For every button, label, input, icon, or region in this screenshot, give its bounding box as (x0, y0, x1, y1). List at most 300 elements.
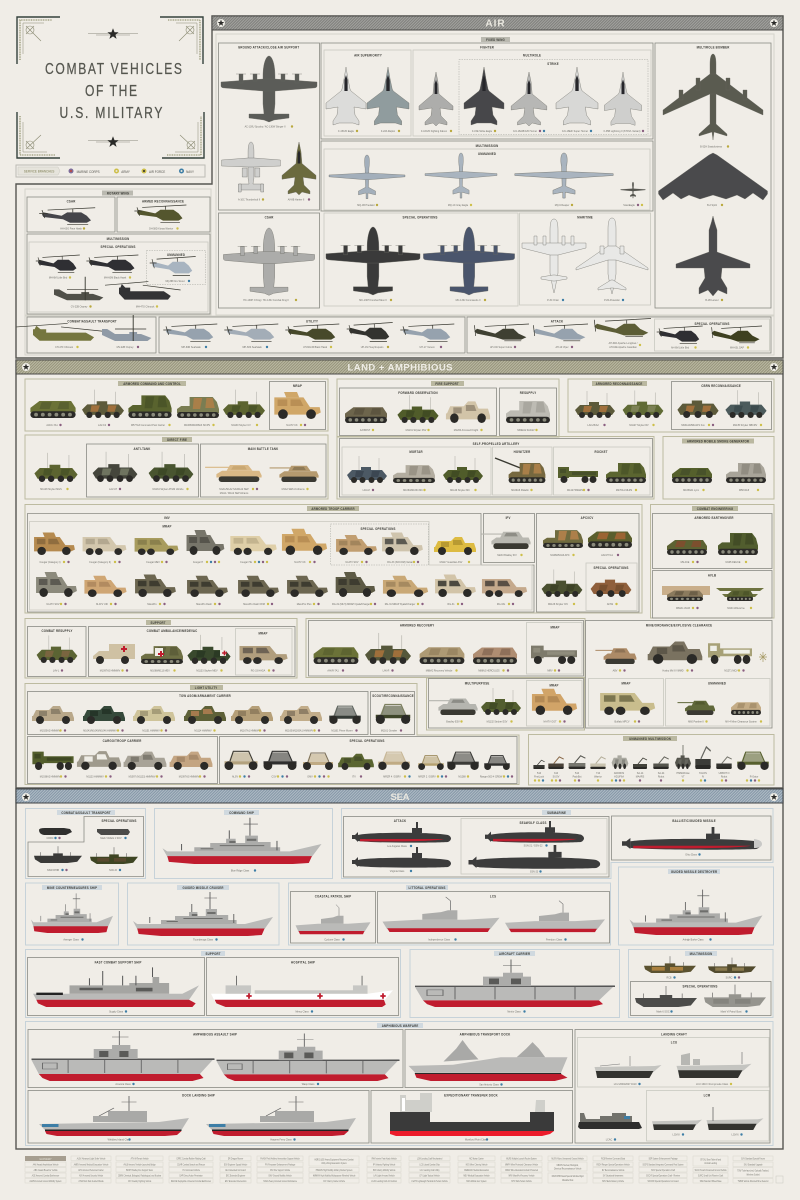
M104: M104 Wolverine (727, 606, 745, 610)
icon: winged star top (88, 28, 138, 39)
panel: armored mobile smoke generator (663, 436, 774, 499)
M997: M1097A2 HMMWV (100, 668, 120, 673)
tag: SUPPORT (151, 621, 166, 625)
LAV-C2 (82, 390, 124, 427)
heading: COMBAT RESUPPLY (42, 629, 73, 633)
M1097: M1097 (M1123) HMMWV (129, 774, 156, 779)
panel: special operations (29, 242, 208, 312)
panel: guided missile cruiser (128, 883, 279, 945)
ALSV (224, 751, 258, 779)
P-8: P-8A Poseidon (604, 298, 620, 302)
Cougar MEV: Cougar MEV (146, 560, 160, 564)
glossary column 13: SV Situational Awareness (603, 1174, 623, 1177)
M1123 (77, 751, 121, 779)
panel: mortar (342, 447, 491, 495)
glossary column 11: MRAP Mine-Resistant Ambush Protected (505, 1169, 539, 1172)
glossary column 2: ATGM Anti-Tank Guided Missile (79, 1180, 104, 1183)
Cougar II (83, 537, 126, 564)
F-22: F-22A Raptor (381, 129, 395, 133)
tag: AMPHIBIOUS WARFARE (382, 1024, 419, 1028)
AH-64: AH-64D Apache Longbow / (609, 341, 638, 345)
Prime Mover: M1161 Prime Mover (331, 728, 353, 733)
MV-22: MV-22B Osprey (117, 345, 134, 349)
panel: unmanned multimission (528, 734, 774, 785)
panel: multirole bomber (655, 43, 771, 308)
MRZR 2: MRZR 2 / DSRV (418, 774, 436, 779)
panel: unmanned (666, 678, 770, 726)
Growler: M1161 Growler (381, 728, 397, 733)
glossary column 15: SURC Small Unit Riverine Craft (698, 1174, 723, 1177)
AC-130 (221, 56, 317, 129)
glossary column 9: LCS Littoral Combat Ship (420, 1163, 440, 1166)
M997 (93, 644, 135, 673)
M1A1: M1A1/M1A2 SA/M1A2 SEP (219, 487, 249, 491)
glossary column 15 (693, 1156, 728, 1183)
ALSV: ALSV (232, 774, 238, 779)
heading: MRAP (621, 681, 631, 686)
Ticonderoga: Ticonderoga Class (193, 937, 214, 942)
glossary column 16: Wireless Guided (747, 1174, 760, 1176)
panel: special operations (28, 816, 144, 876)
MaxxPro Dash: MaxxPro Dash (196, 602, 212, 606)
MQ-1 (329, 155, 405, 207)
panel: amphibious warfare (26, 1022, 773, 1146)
AV-8B (282, 142, 316, 202)
Mercy (211, 976, 393, 1014)
robot 7: Robot (658, 774, 664, 779)
MH-47 (105, 282, 181, 309)
Mercy: Mercy Class (296, 1009, 309, 1014)
header band: sea (16, 789, 783, 803)
CSV: CSV (272, 774, 277, 779)
title line 1: COMBAT VEHICLES (45, 60, 182, 77)
M1271: M1271 MCV (724, 668, 738, 673)
robot 7 (653, 757, 669, 782)
Blue Ridge (162, 818, 322, 873)
robot 5 (611, 755, 628, 782)
tag: UNMANNED MULTIMISSION (629, 737, 671, 741)
glossary column 16: SVU Standard Upgrade (744, 1163, 763, 1166)
glossary column 4 (169, 1156, 213, 1183)
glossary column 7: Utility Lifting Evacuation System (321, 1162, 347, 1165)
glossary column 13 (593, 1156, 633, 1183)
robot 1: FirstLook (534, 774, 545, 779)
M9 ACE: M9 ACE (681, 560, 690, 564)
SSN-21: SSN-21 / SSN-22 (524, 843, 543, 848)
panel: multimission (628, 950, 773, 1018)
AAV C7: AAVC-7A1 (46, 423, 58, 427)
glossary column 11: MRV MaxxPro Recovery Vehicle (509, 1175, 535, 1177)
M93 Fox: M93A1/M93A1P1 Fox (681, 423, 705, 427)
panel: MRAP (270, 382, 326, 430)
LAV-R (365, 633, 411, 673)
panel: MRAP (30, 522, 532, 610)
M113: M1068/M113 APC (550, 553, 570, 557)
UH-1N (347, 322, 393, 349)
glossary column 16: TOW Tube-launched, Optically Tracked, (737, 1169, 769, 1173)
section: LAND + AMPHIBIOUS (16, 360, 783, 788)
panel: submarine (342, 808, 773, 878)
glossary column 10: MEV Medical Evacuation Vehicle (464, 1174, 490, 1177)
M1167: M1167A1 HMMWV (240, 728, 260, 733)
panel: special operations (220, 736, 517, 784)
LAV-C2: LAV-C2 (98, 423, 107, 427)
heading: ARMED RECONNAISSANCE (142, 199, 185, 204)
F-15E (464, 67, 504, 133)
M-ATV SOV row 2: M-ATV SOV (47, 602, 60, 606)
panel: combat ambulance (88, 626, 295, 676)
section: AIR (16, 16, 783, 358)
heading: STRIKE (547, 62, 559, 66)
header band: sea: SEA (390, 792, 410, 803)
M1064 (393, 465, 435, 492)
M1131: M1131 Stryker FSV (406, 428, 427, 432)
tag (494, 951, 535, 956)
glossary (25, 1156, 783, 1183)
panel: seawolf class (461, 818, 607, 874)
M1117 (434, 537, 476, 564)
MH-60R: MH-60R Seahawk (181, 345, 201, 349)
publisher mark (776, 1176, 783, 1183)
MQ-9: MQ-9 Reaper (555, 203, 569, 207)
panel: combat assault transport (26, 808, 146, 878)
heading: SPECIAL OPERATIONS (402, 215, 438, 220)
tag: ARMORED COMMAND AND CONTROL (123, 382, 181, 386)
panel: multipurpose (426, 678, 584, 730)
M1128: M1128 Stryker MGS (40, 487, 62, 491)
Blue Ridge: Blue Ridge Class (231, 868, 250, 873)
MRZR (378, 752, 411, 779)
panel: special operations (654, 319, 770, 351)
glossary column 6: FAASV Field Artillery Ammunition Support Vehicle (260, 1157, 301, 1160)
heading: ROCKET (595, 450, 608, 454)
glossary column 14: SOC Special Operations Craft (651, 1169, 675, 1172)
robot 8: HMMW/Jaw (677, 771, 689, 775)
M-ATV CK: M-ATV CK (294, 560, 306, 564)
glossary column 8: LCAC Landing Craft Air Cushion (371, 1180, 398, 1183)
heading: SPECIAL OPERATIONS (694, 322, 730, 326)
M1114 (184, 706, 226, 733)
LAV-25: LAV-25/A2 (587, 423, 599, 427)
glossary column 5: EXC Extended Engineer (226, 1174, 245, 1177)
robot 9 (695, 747, 711, 782)
tag: rotary wing: ROTARY WING (107, 191, 129, 196)
Cougar I: Cougar (Category I) (39, 560, 61, 564)
robot 3: PackBot (573, 774, 582, 779)
AH-64 (594, 318, 651, 349)
M113 MEV: M1068/M113 MEV (150, 668, 170, 673)
M1200 (446, 401, 490, 432)
glossary heading: GLOSSARY (39, 1156, 52, 1161)
M1126: M1126 Stryker ICV (548, 602, 568, 606)
panel: unmanned (324, 149, 650, 210)
panel: amphibious transport dock (405, 1030, 572, 1088)
tag: LIGHT UTILITY (195, 686, 218, 690)
RG-31 Mk3 (332, 572, 376, 606)
panel: support (26, 950, 400, 1018)
title line 3: U.S. MILITARY (60, 104, 162, 121)
P-3: P-3C Orion (547, 298, 559, 302)
MaxxPro Dash DXM (238, 576, 279, 606)
heading: MRAP (258, 631, 268, 636)
glossary column 6: FSV Fire Support Vehicle (270, 1169, 291, 1172)
M113 MEV (141, 646, 183, 673)
header band: AIR (212, 16, 783, 30)
panel: resupply (500, 388, 556, 436)
heading: ATTACK (551, 319, 563, 324)
M1130 (223, 390, 265, 427)
tag: SUPPORT (206, 952, 221, 956)
glossary column 15: SUGV Small Unmanned Ground Vehicle (695, 1170, 727, 1172)
MaxxPro: MaxxPro (147, 602, 157, 606)
glossary column 9: LSATV Lightweight Tactical All-Terrain Vehicle (411, 1180, 448, 1183)
heading: APC/ICV (581, 516, 594, 520)
panel: amphibious assault ship (28, 1030, 403, 1088)
Avenger: Avenger Class (63, 937, 79, 942)
CRRC: CRRC (47, 836, 53, 840)
panel: mine ordnance explosive clearance (586, 620, 772, 728)
glossary column 14 (639, 1156, 687, 1183)
M984 (473, 648, 517, 673)
robot 3 (569, 756, 585, 782)
glossary column 1: AAV Assault Amphibious Vehicle (33, 1163, 59, 1166)
tag: fixed wing: FIXED WING (486, 38, 505, 42)
LAV-AT: LAV-AT (109, 487, 117, 491)
glossary column 2 (71, 1156, 111, 1183)
SOC-R: SOC-R (109, 868, 117, 872)
Nimitz: Nimitz Class (507, 1009, 521, 1014)
MaxxPro Dash (187, 576, 228, 606)
glossary column 6 (257, 1156, 303, 1183)
RCB: RCB (666, 975, 672, 980)
heading: UNMANNED (478, 152, 496, 156)
B-2: B-2 Spirit (707, 203, 717, 207)
M1025 (32, 706, 74, 733)
glossary column 10 (458, 1156, 495, 1183)
LCU 2000 (594, 1056, 662, 1086)
glossary column 3 (116, 1156, 163, 1183)
glossary column 12: NBCRV Nuclear, Biological, (557, 1165, 579, 1167)
heading: AIR SUPERIORITY (354, 53, 382, 58)
heading: AVLB (708, 573, 716, 578)
RCB (644, 956, 696, 980)
glossary heading (25, 1156, 66, 1161)
legend: service branches (16, 165, 205, 177)
M1135: M1135 Stryker NBCRV (733, 423, 757, 427)
Mark 6 (635, 986, 697, 1014)
Supply: Supply Class (109, 1009, 124, 1014)
glossary column 3: CBRN Chemical, Biological, Radiological, and Nuclear (118, 1175, 161, 1177)
HH-60G: HH-60G Pave Hawk (60, 226, 82, 231)
Panther: M60 Panther II (688, 719, 704, 724)
heading: MULTIMISSION (107, 236, 130, 241)
panel: fixed wing (216, 34, 774, 315)
M1117: M1117 Guardian ASV (440, 560, 463, 564)
glossary column 13: RCB Riverine Command Boat (601, 1157, 625, 1160)
Independence (382, 897, 500, 942)
panel: rotary wing (25, 189, 211, 315)
M58: M58 Wolf (739, 488, 749, 492)
heading: CBRN RECONNAISSANCE (701, 384, 741, 388)
robot 1: 510 (537, 771, 541, 775)
AAV-P7: AAV-P7/A1 (601, 553, 613, 557)
Ranger: Ranger 500 4 CREW (480, 774, 503, 779)
M88A2 (420, 647, 464, 673)
AC-130: AC-130U Spooky / AC-130W Stinger II (245, 124, 286, 129)
heading: MINE/ORDNANCE/EXPLOSIVE CLEARANCE (646, 623, 713, 628)
heading: IFV (506, 516, 511, 520)
glossary column 14: SOCOM Special Operations Command (648, 1180, 679, 1183)
glossary column 4: DAP Direct Action Penetrator (180, 1174, 203, 1177)
M2A3: M2A3 Bradley IFV (497, 553, 517, 557)
MH-60M (86, 255, 138, 280)
panel: maritime (520, 213, 650, 305)
robot 6 (633, 758, 647, 782)
heading: AMPHIBIOUS TRANSPORT DOCK (460, 1032, 511, 1037)
Arleigh Burke: Arleigh Burke Class (683, 937, 704, 942)
header band: land (16, 360, 783, 374)
M1097A2 (170, 752, 212, 779)
legend: service branches: NAVY (186, 169, 195, 174)
Harpers (206, 1096, 356, 1142)
LCM 6: LCM 6 (732, 1132, 739, 1137)
glossary column 14: SOC-R Special Operations Craft - Riverine (646, 1174, 681, 1177)
HIMARS: M142 HIMARS (567, 488, 583, 492)
MaxxPro Plus: MaxxPro Plus (297, 602, 312, 606)
heading: FORWARD OBSERVATION (398, 391, 438, 395)
FA-18E (556, 67, 598, 133)
heading: RESUPPLY (520, 391, 537, 395)
MH-6M: MH-6M Little Bird (49, 275, 68, 280)
heading: MRAP (549, 683, 559, 688)
glossary column 8: IMV Infantry Mobility Vehicle (373, 1169, 396, 1172)
heading: COMBAT/ASSAULT TRANSPORT (67, 319, 117, 324)
RG-33 HAGA: RG-33 HAGA (251, 668, 265, 673)
Cougar I (34, 532, 75, 564)
LAV-M: LAV-M (363, 488, 370, 492)
tag: rotary wing (102, 190, 133, 196)
M1151 (133, 706, 175, 733)
panel: armored reconnaissance (568, 379, 774, 432)
panel: hospital ship (206, 958, 398, 1016)
UH-1Y (400, 324, 454, 349)
Ohio (622, 827, 762, 857)
panel: main battle tank (200, 444, 326, 497)
M3A3 BFIST: A3 BFIST (360, 428, 371, 432)
heading: TOW ASGM/ARMAMENT CARRIER (179, 694, 231, 698)
Cougar MEV (135, 538, 178, 564)
R-Gator (737, 752, 769, 782)
MRZR 2 (418, 756, 447, 779)
heading: MULTIPURPOSE (465, 681, 490, 686)
heading: HOSPITAL SHIP (291, 960, 315, 965)
heading: IMV (164, 516, 170, 520)
AH-6M: AH-6M Little Bird (671, 345, 690, 350)
heading: SELF-PROPELLED ARTILLERY (473, 442, 520, 446)
LAV-L: LAV-L (53, 668, 60, 673)
panel: support (25, 618, 297, 678)
F-35: F-35B Lightning II (STOVL Variant) (604, 129, 641, 133)
Whidbey: Whidbey Island Class (108, 1137, 131, 1142)
panel: command ship (154, 808, 332, 878)
panel: AVLB (652, 570, 772, 618)
robot 1 (533, 760, 545, 782)
icon: winged star bottom (88, 136, 138, 147)
San Antonio (408, 1040, 568, 1087)
FA-18E: F/A-18E/F Super Hornet (562, 129, 588, 133)
glossary column 1 (25, 1162, 66, 1183)
tag (623, 736, 677, 741)
heading: SCOUT/RECONNAISSANCE (372, 694, 414, 698)
M1165: M1165/M1165A1 HMMWV (285, 728, 313, 733)
heading: SPECIAL OPERATIONS (349, 739, 385, 743)
panel: expeditionary transfer dock (371, 1090, 572, 1143)
UH-1N: UH-1N Huey/Iroquois (361, 345, 384, 349)
tag (201, 951, 225, 956)
panel: multimission (321, 141, 653, 211)
glossary column 10: MC Mortar Carrier (469, 1157, 484, 1160)
F-35 (604, 72, 644, 133)
M3A3 BFIST (345, 407, 387, 432)
heading: CARGO/TROOP CARRIER (103, 739, 142, 743)
B-2 (658, 153, 768, 207)
glossary column 2: APC Armored Personnel Carrier (78, 1169, 104, 1172)
glossary column 1: ABV Assault Breacher Vehicle (34, 1169, 58, 1172)
panel: air superiority (324, 50, 411, 136)
panel: MRAP (526, 680, 582, 726)
San Antonio: San Antonio Class (479, 1082, 499, 1087)
Nimitz (415, 960, 615, 1014)
heading: SPECIAL OPERATIONS (360, 527, 396, 531)
Ohio: Ohio Class (685, 852, 697, 857)
RG-33 SOCOM: RG-33 (SOCOM) Variants (387, 560, 415, 564)
M1134: M1134 Stryker ATGM Vehicle (153, 487, 184, 491)
glossary column 2: ASV Armored Security Vehicle (79, 1174, 104, 1177)
Montford Point: Montford Point Class (465, 1137, 488, 1142)
M1133: M1133 Stryker MEV (196, 668, 218, 673)
D9: M105 DEUCE (726, 560, 741, 564)
tag: MULTIMISSION (690, 952, 713, 956)
AH-1W (474, 324, 529, 349)
glossary column 10: MEDEVAC Medical Evacuation (464, 1169, 490, 1172)
glossary column 10: MCV Mine Clearing Vehicle (466, 1164, 488, 1166)
panel: strike (459, 60, 648, 134)
F-16: F-16C/D Fighting Falcon (421, 129, 447, 133)
F-15E: F-15E Strike Eagle (472, 129, 493, 133)
panel: special operations (630, 982, 771, 1016)
Virginia (352, 847, 451, 873)
heading: HOWITZER (514, 450, 531, 454)
panel: CBRN reconnaissance (672, 382, 772, 430)
M-ATV Ox: M-ATV OGT (543, 719, 557, 724)
legend: service branches: AIR FORCE (149, 169, 166, 174)
Cougar HE: Cougar HE (240, 560, 252, 564)
panel: IMV (28, 514, 534, 612)
robot 9: IV (702, 774, 704, 779)
panel: LCS (378, 892, 610, 943)
M1288: M1288 (458, 774, 466, 779)
tag: MINE COUNTERMEASURES SHIP (47, 886, 98, 890)
Mark V: Mark V/Mark 1 SOV (100, 836, 122, 840)
RG-33: RG-31 (448, 602, 455, 606)
panel: rocket (554, 447, 650, 495)
Bradley ESV: Bradley ESV (446, 719, 460, 724)
panel: anti-tank (86, 444, 198, 497)
glossary column 4: CRRC Combat Rubber Raiding Craft (176, 1157, 206, 1160)
B-1: B-1B Lancer (705, 298, 719, 302)
heading: SPECIAL OPERATIONS (682, 984, 718, 989)
panel: light utility (25, 684, 519, 784)
